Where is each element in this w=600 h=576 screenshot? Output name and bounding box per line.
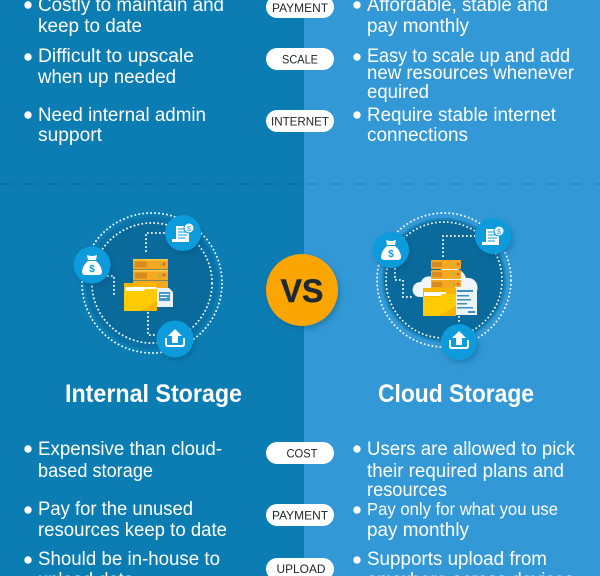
icon: document [455,287,477,315]
text block: cloud storage bottom list: Supports upload from [367,549,547,570]
icon: folder [124,283,157,311]
icon: receipt [475,218,511,254]
text block: cloud storage top list: Easy to scale up and add [367,46,570,67]
label pill: upload [266,558,334,576]
VS badge [266,254,338,326]
panel: cloud storage background [304,0,600,576]
text block: internal storage bottom list: Pay for the unused [38,499,193,520]
text block: internal storage bottom list: Should be in-house to [38,549,220,570]
icon: money bag: $ [89,264,95,275]
label pill: payment bottom [266,504,334,526]
label pill: scale [266,48,334,70]
VS badge: VS [281,273,323,309]
label pill: internet [266,110,334,132]
icon: cloud storage diagram [373,213,511,360]
text block: internal storage top list: Need internal admin [38,105,206,126]
text block: cloud storage bottom list: pay monthly [367,520,469,541]
icon: cloud [413,268,478,297]
label pill: cost: COST [286,446,318,460]
label pill: scale: SCALE [282,52,318,66]
icon: receipt: $ [497,229,501,236]
label pill: payment top [266,0,334,18]
text block: cloud storage top list: connections [367,125,468,146]
text block: internal storage bottom list: Expensive than cloud- [38,439,222,460]
text block: internal storage bottom list: resources keep to date [38,520,227,541]
text block: cloud storage bottom list: resources [367,480,447,501]
label pill: payment top: PAYMENT [272,1,329,15]
text block: cloud storage bottom list [353,439,575,576]
icon: money bag [373,232,409,268]
icon: server stack [431,260,461,289]
text block: internal storage top list: support [38,125,103,146]
icon: upload [441,324,477,360]
text block: internal storage top list: when up needed [37,67,176,88]
icon: upload [156,320,194,358]
label pill: upload: UPLOAD [276,562,326,576]
icon: server stack [133,259,168,291]
text block: cloud storage top list: pay monthly [367,16,469,37]
icon: folder [423,288,456,316]
icon: money bag [74,246,110,284]
text block: cloud storage top list: equired [367,82,429,103]
text block: internal storage top list: Difficult to upscale [38,46,194,67]
text block: internal storage top list: keep to date [38,16,142,37]
text block: internal storage top list [24,0,224,146]
icon: receipt: $ [187,226,191,233]
panel: internal storage background [0,0,304,576]
text block: cloud storage bottom list: Users are allowed to pick [367,439,575,460]
icon: money bag: $ [388,249,394,260]
label pill: cost [266,442,334,464]
heading: cloud storage: Cloud Storage [378,380,534,408]
text block: internal storage bottom list [24,439,227,576]
text block: cloud storage top list [353,0,575,146]
icon: receipt [165,215,201,251]
text block: internal storage bottom list: based storage [38,461,153,482]
label pill: payment bottom: PAYMENT [272,508,329,522]
text block: cloud storage top list: new resources whenever [367,63,575,84]
text block: cloud storage top list: Require stable internet [367,105,557,126]
icon: internal storage diagram [74,213,222,358]
heading: internal storage: Internal Storage [65,380,242,408]
text block: cloud storage bottom list: their required plans and [367,461,564,482]
text block: cloud storage bottom list: Pay only for what you use [367,499,558,519]
label pill: internet: INTERNET [271,114,330,128]
icon: document [157,288,173,307]
